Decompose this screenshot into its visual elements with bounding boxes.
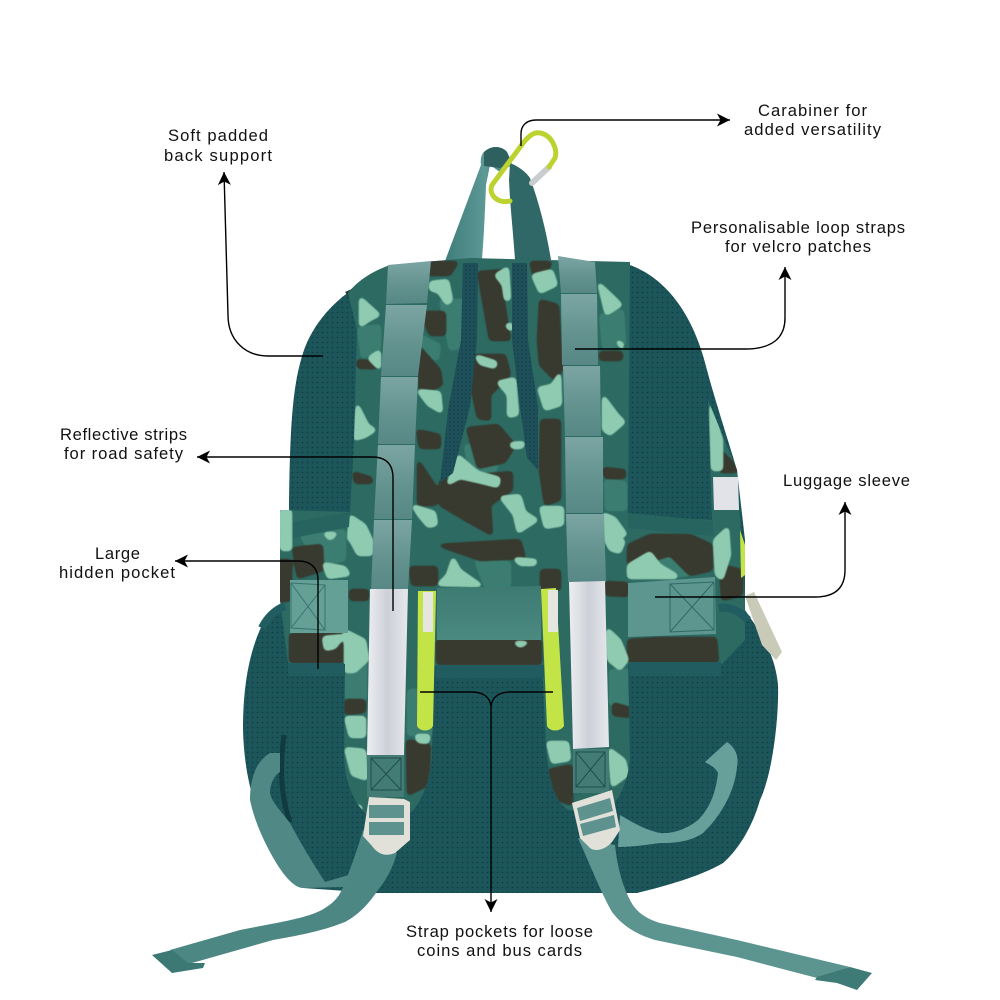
camouflage panel (280, 258, 745, 814)
backpack illustration (152, 133, 872, 990)
arrow: soft padded back support (224, 172, 323, 356)
left inner mesh band (440, 263, 478, 483)
left horizontal strap (290, 580, 348, 633)
arrow: strap pockets (420, 692, 553, 912)
label: reflective strips: Reflective strips (60, 425, 187, 444)
right pad lower rim (628, 513, 713, 536)
lower left main strap (152, 830, 397, 973)
right X patch (573, 749, 609, 793)
carabiner (491, 133, 556, 202)
label: soft padded back support (164, 126, 272, 165)
label: personalisable loop straps (691, 218, 905, 256)
label: carabiner: added versatility (744, 120, 882, 139)
lower right main strap (578, 838, 872, 990)
label: strap pockets: coins and bus cards (417, 941, 582, 960)
label: large hidden pocket: hidden pocket (59, 563, 175, 582)
left reflective strip (367, 589, 408, 755)
left pad lower rim (293, 512, 350, 538)
label: soft padded back support: Soft padded (168, 126, 268, 145)
small dark top trim (345, 283, 367, 299)
right buckle (572, 790, 620, 850)
top handle (445, 147, 551, 261)
arrow: reflective strips (197, 457, 393, 611)
label: reflective strips: for road safety (64, 444, 184, 463)
label: large hidden pocket: Large (95, 544, 140, 563)
label: strap pockets: Strap pockets for loose (406, 922, 593, 941)
right horizontal strap (628, 577, 716, 637)
central horizontal strap (437, 586, 541, 640)
neoprene body (243, 258, 778, 893)
right webbing strap (558, 256, 606, 582)
left buckle (363, 797, 410, 855)
lower left loop (250, 753, 352, 888)
pocket rims (262, 606, 748, 678)
label: personalisable loop straps: for velcro patches (725, 237, 871, 256)
infographic: backpack with feature callouts (60, 104, 910, 990)
right reflective strip (569, 581, 609, 749)
side zip puller (745, 592, 782, 660)
label: strap pockets (406, 922, 593, 960)
left side crease (282, 735, 290, 822)
lower right loop (618, 742, 738, 847)
label: reflective strips (60, 425, 187, 463)
side luggage tag (713, 477, 739, 510)
label: carabiner (744, 101, 882, 139)
label: luggage sleeve: Luggage sleeve (783, 471, 910, 490)
label: large hidden pocket (59, 544, 175, 582)
right inner mesh band (512, 263, 538, 470)
label: carabiner: Carabiner for (758, 101, 867, 120)
arrow: personalisable loop straps (575, 267, 785, 349)
arrow: large hidden pocket (175, 561, 318, 669)
left zip pocket (417, 591, 436, 730)
left X patch (367, 755, 404, 797)
left webbing strap (371, 261, 431, 590)
label: soft padded back support: back support (164, 146, 272, 165)
arrow: luggage sleeve (655, 502, 845, 597)
arrow: carabiner (521, 120, 730, 146)
label: personalisable loop straps: Personalisable loop straps (691, 218, 905, 237)
right zip pocket (541, 588, 564, 730)
side zip (740, 530, 745, 578)
